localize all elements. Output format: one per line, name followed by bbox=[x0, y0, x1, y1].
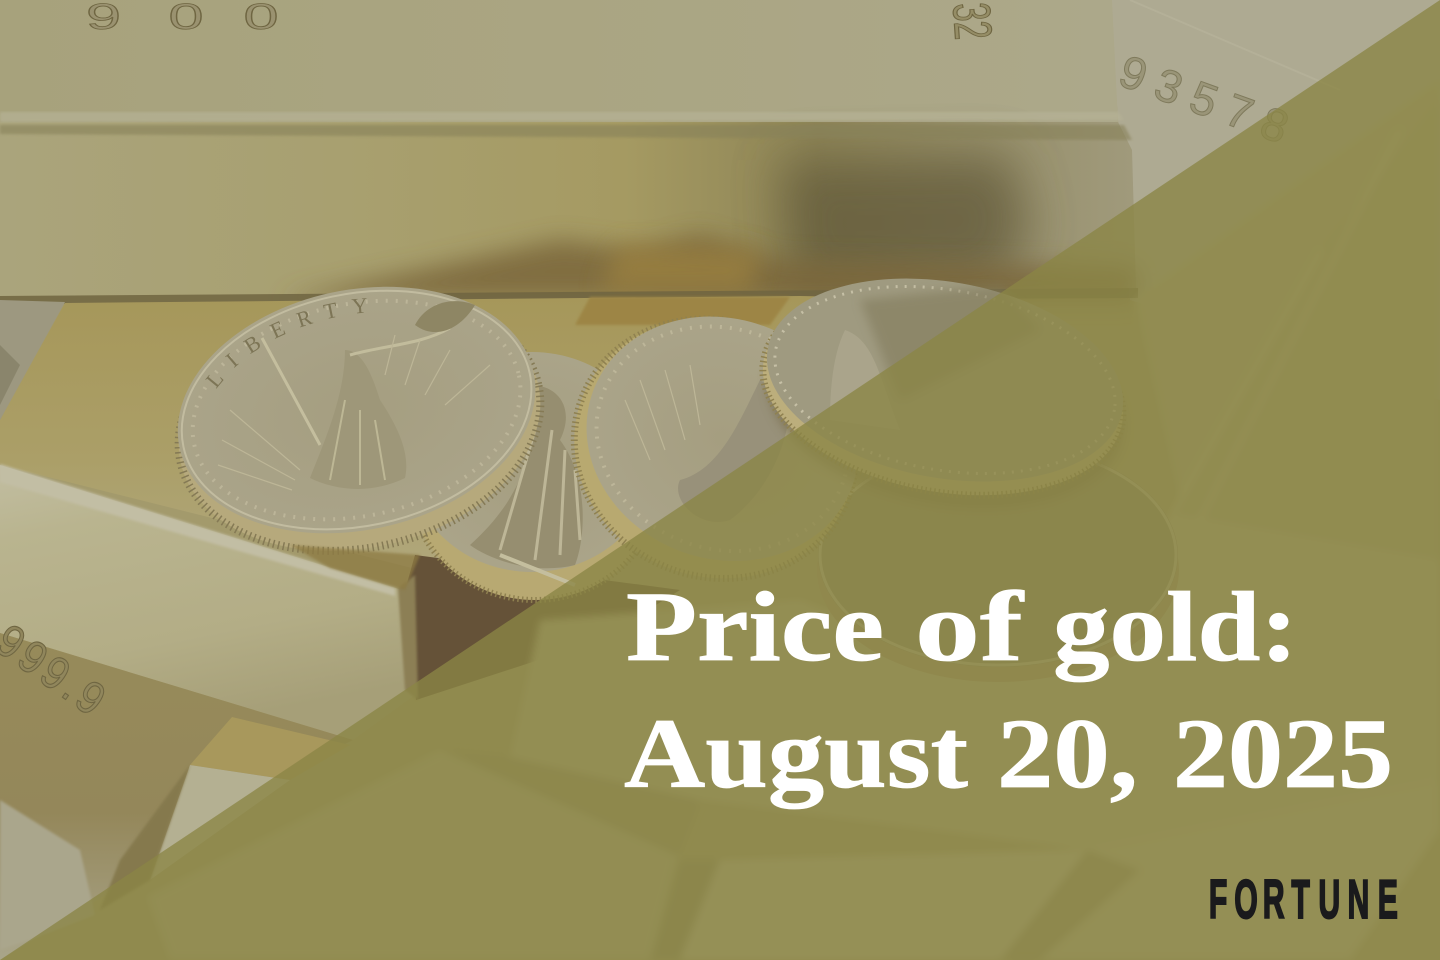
shadow between coins and lower bar bbox=[290, 545, 420, 590]
title line 2 bbox=[624, 698, 1393, 809]
title line 2: 20, bbox=[997, 698, 1138, 809]
cream front of left bar bbox=[0, 464, 680, 740]
coin 2: behind bbox=[410, 352, 660, 600]
title line 1 bbox=[626, 571, 1298, 682]
coin 4: right coin bbox=[746, 252, 1141, 535]
lower left bars bbox=[0, 615, 353, 960]
coin 1 figure: Liberty bbox=[206, 298, 490, 490]
title line 1: gold: bbox=[1053, 571, 1298, 682]
title line 2: 2025 bbox=[1173, 698, 1393, 809]
left edge shadow bar bbox=[0, 300, 65, 420]
dark gap under top bar bbox=[0, 288, 1138, 304]
title bbox=[624, 571, 1393, 809]
right background bar with serial number bbox=[1110, 0, 1440, 400]
middle gold bar behind coins bbox=[0, 296, 1000, 570]
top gold bar: 32 bbox=[941, 1, 1002, 41]
coin 5: under overlay bbox=[817, 443, 1179, 682]
coin 3: centre coin bbox=[537, 276, 893, 618]
coin 1: large left coin bbox=[174, 286, 544, 554]
top gold bar bbox=[0, 0, 1136, 300]
title line 2: August bbox=[624, 698, 968, 809]
Fortune logo: FORTUNE bbox=[1209, 870, 1398, 930]
coin 1 figure: Liberty: LIBERTY bbox=[206, 298, 366, 388]
right background bar with serial number: 93578 bbox=[1113, 45, 1307, 158]
title line 1: of bbox=[915, 571, 1025, 682]
title line 1: Price bbox=[626, 571, 884, 682]
